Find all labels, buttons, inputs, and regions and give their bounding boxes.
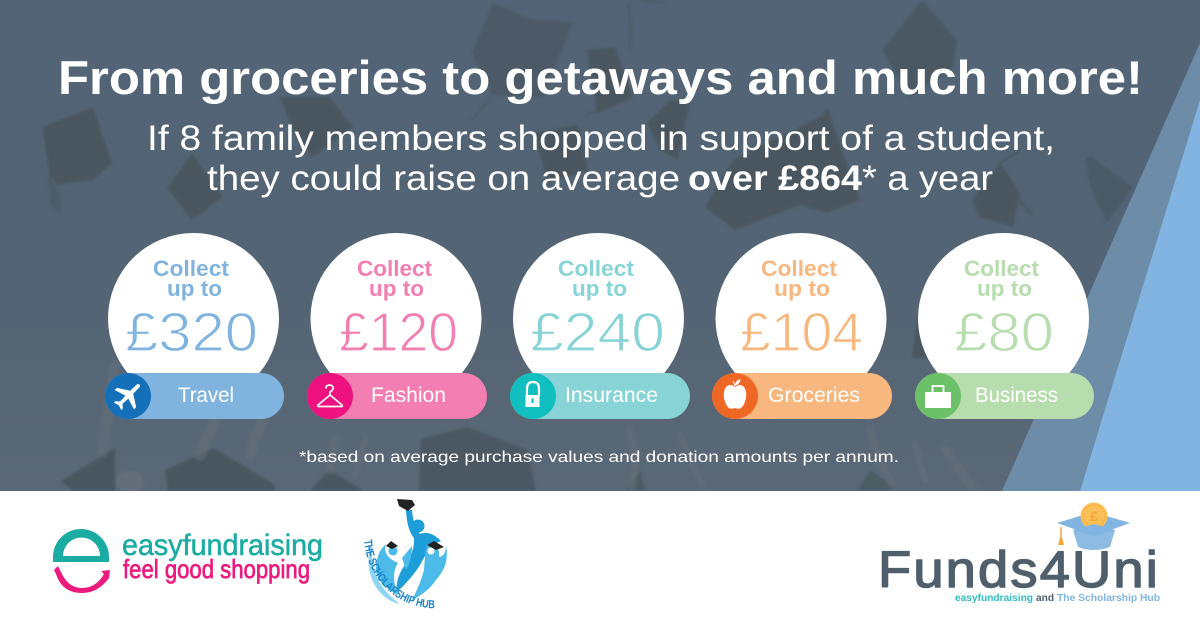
category card: Insurance: £240 [530, 301, 665, 363]
footer band [0, 491, 1200, 628]
category card: Groceries: Collect [761, 256, 838, 281]
footnote: *based on average purchase values and donation amounts per annum. [299, 449, 899, 466]
category card: Fashion [307, 233, 487, 419]
icon: hanger [318, 385, 342, 406]
category card: Groceries: Groceries [768, 384, 860, 407]
logo: Funds4Uni [878, 502, 1160, 604]
subtitle: If 8 family members shopped in support of a student, [147, 119, 1055, 158]
logo: The Scholarship Hub: THE SCHOLARSHIP HUB [364, 539, 434, 608]
icon: e with smile [53, 529, 110, 593]
category card: Insurance: Collect [558, 256, 635, 281]
logo: easyfundraising: easyfundraising [122, 529, 323, 562]
icon: padlock [526, 382, 540, 407]
subtitle: * a year [862, 159, 993, 198]
category card: Travel [105, 233, 284, 419]
category card: Fashion: Fashion [371, 384, 446, 407]
subtitle: they could raise on average [207, 159, 680, 198]
category card: Business: up to [977, 276, 1032, 301]
category card: Insurance: Insurance [565, 384, 658, 407]
title: From groceries to getaways and much more! [58, 51, 1143, 104]
logo: Funds4Uni: The Scholarship Hub [1057, 592, 1160, 604]
raised arms [100, 362, 898, 491]
category card: Business: Business [975, 384, 1058, 407]
category card: Fashion: Collect [357, 256, 433, 281]
category card: Travel: Collect [153, 256, 230, 281]
icon: briefcase [925, 386, 951, 408]
icon: coin in graduation cap: £ [1090, 508, 1098, 524]
photo background: graduation caps thrown in the air [0, 0, 1200, 493]
category card: Insurance [510, 233, 690, 419]
logo: Funds4Uni: Funds4Uni [878, 541, 1160, 598]
subtitle: over £864 [688, 159, 863, 198]
logo: easyfundraising [53, 529, 323, 593]
logo: easyfundraising: feel good shopping [123, 554, 310, 584]
icon: graduation caps [386, 499, 444, 550]
logo: The Scholarship Hub [364, 499, 447, 608]
category card: Business [915, 233, 1094, 419]
figures [369, 510, 447, 604]
icon: plane [108, 375, 149, 416]
subtitle [147, 119, 1055, 198]
category card: Business: £80 [954, 301, 1054, 363]
category card: Insurance: up to [572, 276, 627, 301]
icon: apple [724, 380, 746, 409]
logo: Funds4Uni: and [1036, 592, 1054, 604]
logo: Funds4Uni: easyfundraising [955, 592, 1033, 604]
category card: Fashion: £120 [339, 301, 458, 363]
category card: Travel: Travel [178, 384, 234, 407]
category card: Groceries: up to [774, 276, 830, 301]
category card: Travel: up to [167, 276, 222, 301]
icon: coin in graduation cap [1057, 502, 1130, 550]
gowns [61, 448, 115, 491]
category card: Groceries [712, 233, 892, 419]
diagonal accent: light blue [1080, 100, 1200, 491]
category card: Travel: £320 [125, 301, 258, 363]
category card: Groceries: £104 [740, 301, 863, 363]
category card: Business: Collect [964, 256, 1040, 281]
diagonal accent: mid blue [1002, 43, 1200, 491]
category card: Fashion: up to [369, 276, 424, 301]
